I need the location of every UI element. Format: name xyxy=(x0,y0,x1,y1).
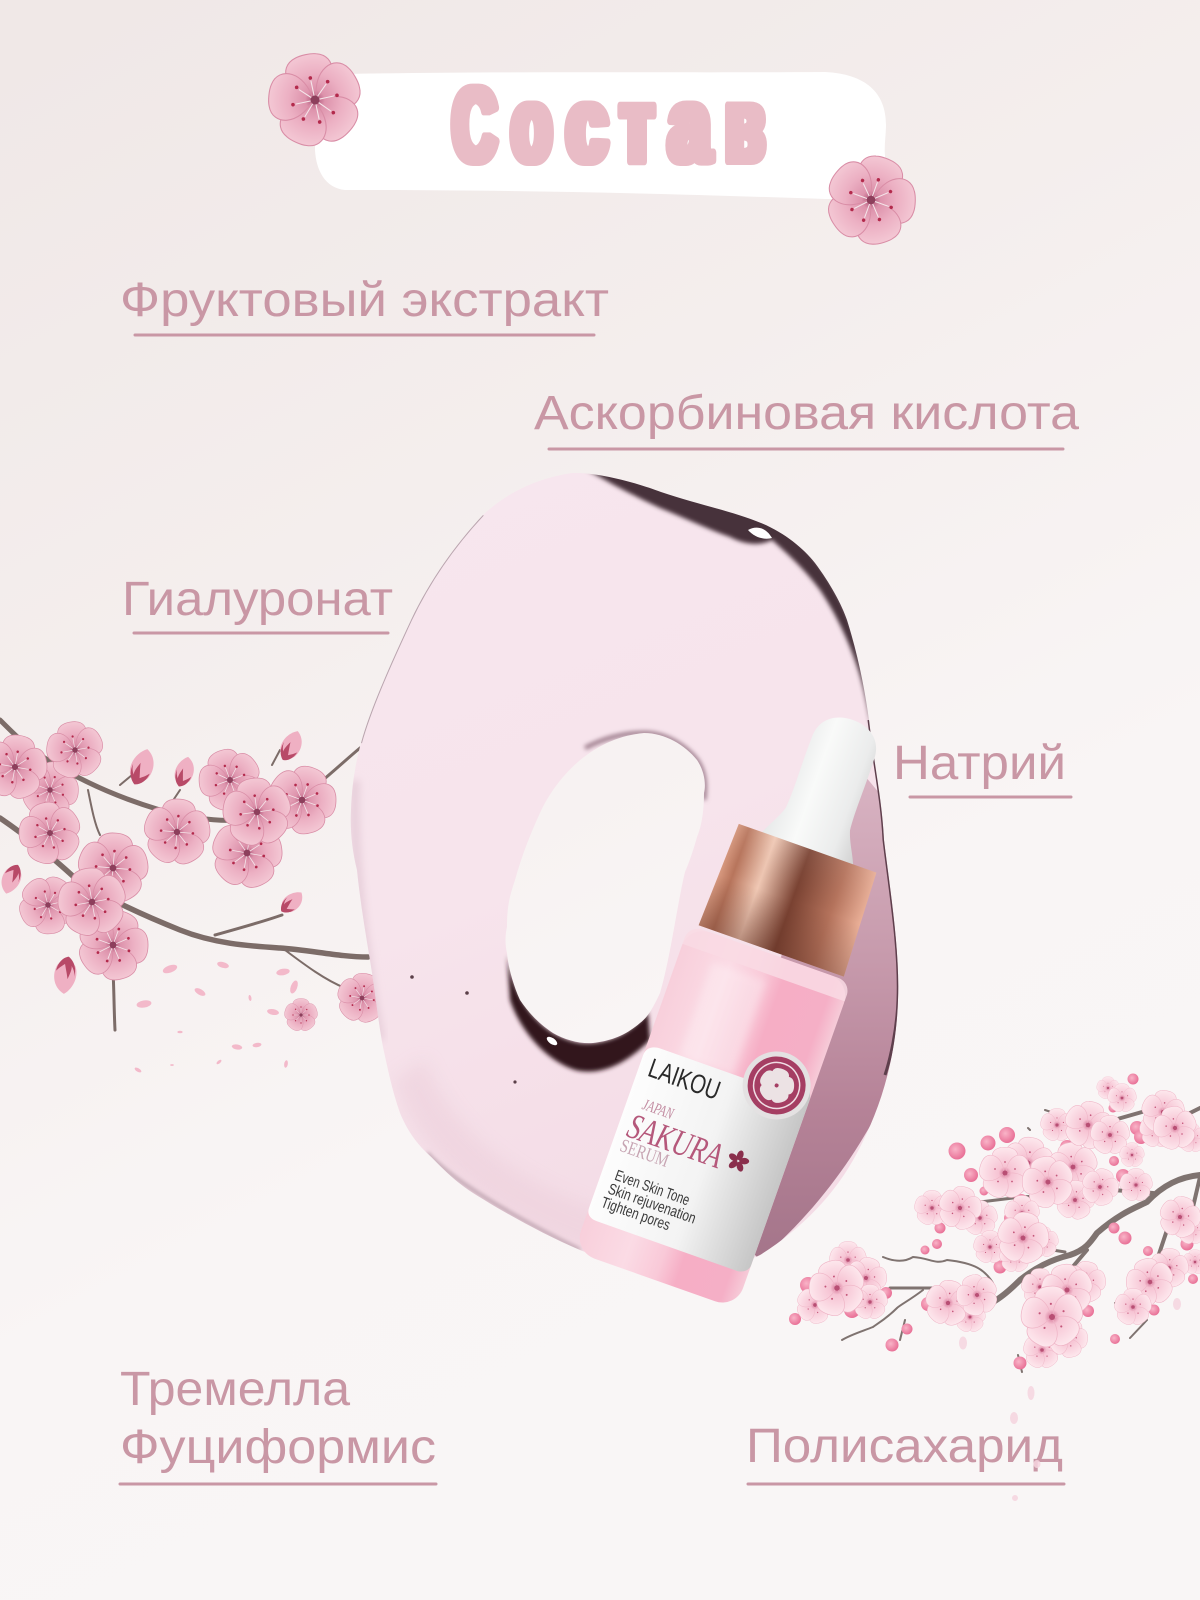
title banner xyxy=(255,44,932,263)
gel body xyxy=(354,473,878,1258)
dark right edge xyxy=(869,720,898,1075)
bottle label: SERUM xyxy=(617,1135,671,1172)
mauve shaded side behind the bottle xyxy=(755,779,898,1256)
left cherry blossom branch xyxy=(0,717,393,1073)
serum bottle xyxy=(574,691,934,1309)
ingredient: sodium: Натрий xyxy=(893,737,1066,790)
ingredient: fruit extract: Фруктовый экстракт xyxy=(120,274,609,327)
falling petals xyxy=(959,1298,1181,1501)
dark glossy top edge xyxy=(585,468,872,730)
small sakura mark xyxy=(724,1147,753,1175)
tiny air bubbles xyxy=(410,975,517,1084)
dark crescent below hole xyxy=(507,955,650,1072)
blossoms xyxy=(0,717,393,1033)
bottle label: Skin rejuvenation xyxy=(606,1181,698,1227)
bottle label: Tighten pores xyxy=(599,1194,672,1234)
banner: white brush shape xyxy=(315,72,886,199)
icon: blossom bottom right xyxy=(808,142,932,263)
title text: о xyxy=(512,67,551,184)
ingredient: ascorbic acid: Аскорбиновая кислота xyxy=(534,387,1079,440)
title text: С xyxy=(453,67,496,184)
emblem xyxy=(733,1042,820,1129)
pink round buds xyxy=(789,1074,1198,1370)
glass body with pink liquid xyxy=(574,925,851,1309)
title text: с xyxy=(567,67,607,184)
rose gold collar xyxy=(699,822,880,977)
falling petals xyxy=(134,961,299,1073)
serum gel blob xyxy=(340,460,910,1270)
ingredient: polysaccharide: Полисахарид xyxy=(746,1420,1063,1473)
gel highlights xyxy=(748,528,772,539)
shadow rim of hole top xyxy=(585,733,705,800)
dropper bulb xyxy=(759,703,900,869)
inner soft highlight xyxy=(679,962,767,1075)
lower dark edge xyxy=(427,1153,580,1250)
pale blossoms xyxy=(789,1077,1200,1370)
bottle label: LAIKOU xyxy=(644,1053,724,1106)
title text: в xyxy=(726,67,764,184)
bottle label: Even Skin Tone xyxy=(613,1167,692,1209)
ingredient: tremella fuciformis: Фуциформис xyxy=(120,1421,436,1474)
soft lower shading xyxy=(406,1074,580,1228)
title text: т xyxy=(621,67,653,184)
ingredient: tremella fuciformis xyxy=(120,1363,436,1484)
title text xyxy=(453,67,764,184)
ingredient: hyaluronate: Гиалуронат xyxy=(122,573,393,626)
glass shoulder rim xyxy=(682,925,851,1001)
bottle label xyxy=(586,1008,822,1275)
bottle label: JAPAN xyxy=(640,1096,677,1123)
title text: а xyxy=(669,67,711,184)
faint left edge xyxy=(361,515,483,743)
ingredient: tremella fuciformis: Тремелла xyxy=(120,1363,350,1416)
flower buds xyxy=(0,727,307,995)
bottle label: SAKURA xyxy=(622,1106,729,1176)
icon: blossom top left xyxy=(255,44,376,161)
soft left edge shading xyxy=(355,780,380,1040)
right cherry blossom branch xyxy=(789,1074,1200,1501)
